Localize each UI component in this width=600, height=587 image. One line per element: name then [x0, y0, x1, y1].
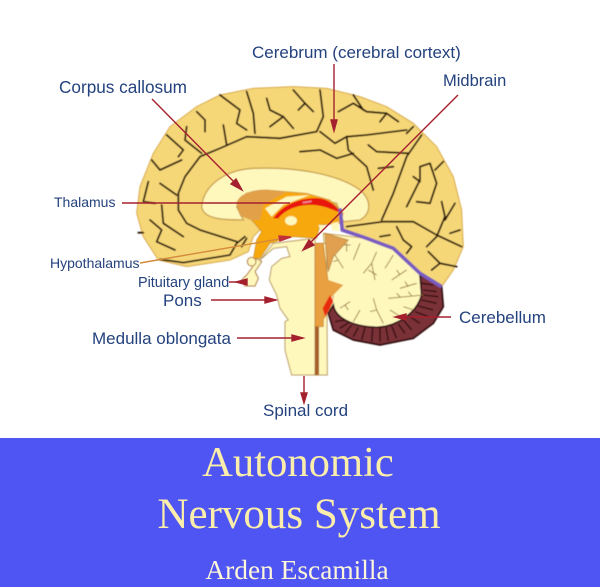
label: spinal cord: Spinal cord	[263, 401, 348, 420]
arrow: midbrain	[303, 95, 458, 250]
arrow: thalamus	[122, 202, 290, 204]
arrow: cerebellum	[395, 314, 451, 320]
arrow: spinal cord	[301, 376, 307, 403]
cerebellar cortex	[328, 275, 443, 345]
purple boundary line	[340, 208, 442, 287]
pointer arrows	[122, 64, 458, 403]
label: cerebrum: Cerebrum (cerebral cortext)	[252, 43, 461, 62]
brainstem and cerebellum	[237, 190, 443, 375]
label: pituitary gland: Pituitary gland	[138, 275, 229, 291]
label: pons: Pons	[163, 291, 202, 310]
label: corpus callosum: Corpus callosum	[59, 77, 187, 97]
arrow: corpus callosum	[152, 99, 242, 190]
label: thalamus: Thalamus	[54, 194, 115, 210]
pituitary gland	[242, 258, 262, 286]
arbor vitae	[333, 243, 423, 323]
orange brainstem wedge	[323, 278, 343, 320]
labels	[50, 43, 546, 420]
cerebrum	[137, 87, 463, 287]
author: Arden Escamilla	[205, 555, 389, 585]
sulci	[138, 90, 462, 270]
red midbrain arc	[273, 198, 342, 218]
title: Autonomic	[202, 439, 394, 486]
subtitle line: Nervous System	[157, 491, 441, 538]
cerebellum	[323, 233, 443, 345]
arrow: pons	[211, 297, 276, 303]
corpus callosum inner cavity	[202, 168, 369, 222]
label: hypothalamus: Hypothalamus	[50, 255, 140, 271]
thalamus	[237, 190, 343, 258]
label: cerebellum: Cerebellum	[459, 308, 546, 327]
arrow: medulla oblongata	[237, 335, 303, 341]
title banner	[0, 438, 600, 587]
arrow: hypothalamus	[140, 236, 291, 263]
arrow: pituitary gland	[229, 279, 247, 285]
arrow: cerebrum	[331, 64, 337, 131]
label: medulla oblongata: Medulla oblongata	[92, 329, 231, 348]
spinal canal strip	[315, 243, 327, 375]
label: midbrain: Midbrain	[443, 72, 506, 90]
brain diagram	[137, 87, 463, 375]
medulla and pons	[260, 238, 315, 375]
